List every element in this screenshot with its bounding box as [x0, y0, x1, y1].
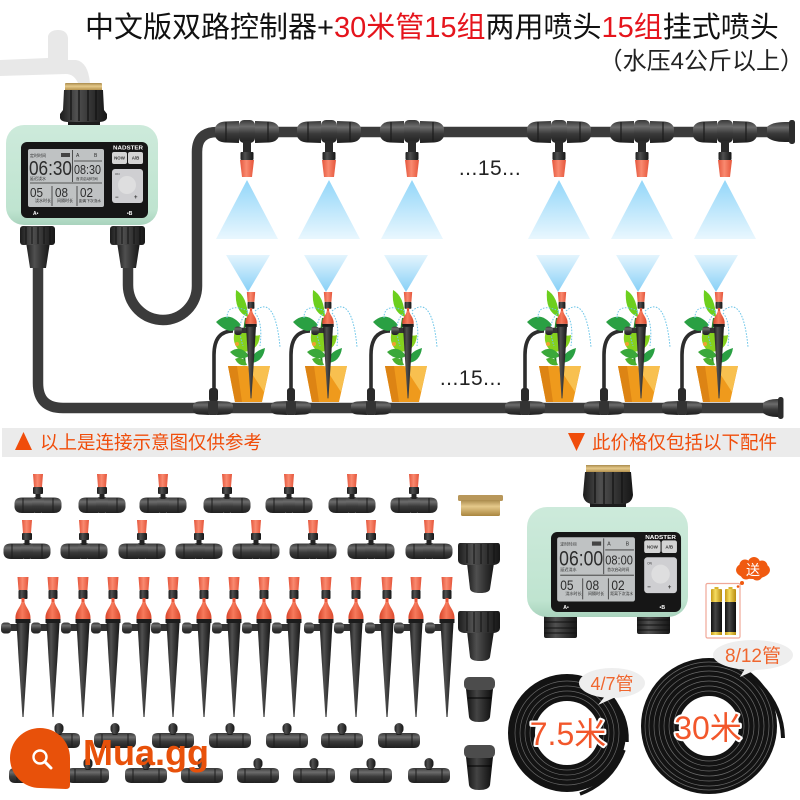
product controller face with LCD: 首次启动时间	[607, 567, 630, 572]
callout: 8/12 tube bubble	[713, 640, 793, 677]
controller face with LCD: 08:30	[74, 163, 101, 177]
icon: hose connector 1	[458, 543, 500, 593]
spray cones: plant nozzles	[226, 255, 738, 292]
banner text: left note: 以上是连接示意图仅供参考	[40, 432, 262, 453]
title: 中文版双路控制器+30米管15组两用喷头15组挂式喷头	[85, 11, 779, 44]
product controller face with LCD: 08:00	[605, 552, 633, 568]
label: 30 m: 30米	[674, 710, 742, 746]
label: ...15... bottom: ...15...	[440, 367, 502, 390]
product controller face with LCD: •B	[660, 605, 665, 611]
row: top misting tee connectors	[215, 120, 757, 177]
controller face with LCD: 06:30	[29, 158, 72, 180]
coil: 7.5 m micro tube	[515, 681, 627, 794]
spray cones: hanging nozzles	[216, 180, 756, 239]
callout: free gift cloud: 送	[746, 562, 760, 578]
product controller face with LCD: ON	[647, 562, 652, 566]
controller face with LCD: 延迟浇水	[30, 175, 46, 181]
controller face with LCD: +	[134, 195, 138, 201]
watermark: Mua.gg logo	[10, 728, 209, 789]
product controller face with LCD: 浇水时长	[565, 590, 582, 596]
row 1: hanging misting tees	[14, 474, 438, 513]
watermark text: Mua.gg	[83, 732, 209, 773]
controller face with LCD: 02	[80, 185, 93, 200]
product controller face with LCD: NADSTER	[645, 535, 676, 541]
diagram: hoses	[38, 132, 772, 408]
icon: brass adapter	[458, 495, 503, 516]
product controller face with LCD: +	[668, 584, 672, 591]
product controller body	[527, 507, 688, 617]
product controller face with LCD: A/B	[665, 544, 674, 549]
controller face with LCD: −	[115, 195, 119, 201]
callout: 4/7 tube bubble: 4/7管	[590, 674, 634, 694]
row 2: hanging misting tees	[4, 520, 452, 559]
product controller face with LCD: A	[607, 542, 611, 548]
controller face with LCD: A	[76, 153, 80, 159]
controller face with LCD: NOW	[114, 156, 126, 160]
product controller face with LCD: 08	[586, 578, 599, 593]
controller body	[6, 125, 158, 225]
row 5: blind tee connectors	[9, 758, 450, 783]
product controller face with LCD: 05	[560, 578, 574, 593]
icon: hose connector 2	[458, 611, 500, 661]
product: dual outlet controller	[527, 465, 688, 638]
label: ...15... top: ...15...	[459, 157, 521, 180]
coil: 30 m main hose	[645, 662, 783, 790]
product controller face with LCD: 定时时间	[560, 541, 577, 547]
controller face with LCD: 08	[55, 185, 68, 200]
watermark badge	[10, 728, 70, 789]
product controller face with LCD	[551, 532, 681, 612]
subtitle: water pressure note: （水压4公斤以上）	[599, 48, 800, 75]
product controller face with LCD: 06:00	[559, 547, 603, 571]
product controller face with LCD: 距离下次浇水	[610, 591, 633, 596]
row 4: blind tee connectors	[38, 723, 420, 748]
icon: top hose end cap	[767, 120, 795, 144]
icon: boxed batteries	[706, 584, 740, 638]
controller face with LCD: NADSTER	[113, 146, 143, 152]
icon: end plug 1	[464, 677, 495, 722]
product controller face with LCD: 间隔时长	[588, 590, 604, 596]
callout: 8/12 tube bubble: 8/12管	[725, 645, 781, 667]
controller face with LCD: A/B	[132, 156, 139, 160]
row: plant stake nozzles	[234, 292, 725, 398]
banner text: right note: 此价格仅包括以下配件	[592, 432, 777, 453]
icon: lower hose end cap	[763, 397, 784, 419]
icon: controller with tap nut	[6, 83, 158, 268]
icon: end plug 2	[464, 745, 495, 790]
row 3: spike stake nozzles	[1, 577, 455, 717]
controller face with LCD: ON	[115, 172, 120, 176]
controller face with LCD	[21, 142, 148, 218]
controller face with LCD: 浇水时长	[35, 197, 51, 203]
icon: grey faucet silhouette	[0, 30, 90, 83]
controller face with LCD: 定时时间	[30, 152, 46, 158]
banner	[2, 428, 800, 457]
controller face with LCD: •B	[127, 211, 133, 217]
product controller face with LCD: 02	[611, 578, 625, 593]
product controller face with LCD: A•	[563, 605, 569, 611]
product controller face with LCD: NOW	[647, 544, 659, 549]
row: lower hose tee connectors	[193, 388, 702, 415]
controller face with LCD: 首次启动时间	[76, 176, 98, 181]
controller face with LCD: 间隔时长	[57, 197, 73, 203]
label: 7.5 m: 7.5米	[530, 716, 606, 752]
callout: 4/7 tube bubble	[579, 668, 645, 705]
row: potted plants	[210, 290, 748, 402]
product controller face with LCD: B	[626, 542, 630, 548]
controller face with LCD: 距离下次浇水	[79, 198, 101, 203]
controller face with LCD: 05	[30, 185, 43, 200]
callout: free gift cloud	[736, 557, 770, 588]
product controller face with LCD: −	[647, 584, 651, 591]
icon: up triangle	[15, 432, 32, 450]
controller face with LCD: A•	[33, 211, 39, 217]
controller face with LCD: B	[94, 153, 98, 159]
controller outlets	[20, 226, 145, 268]
product controller face with LCD: 延迟浇水	[560, 566, 577, 572]
icon: down triangle	[568, 433, 585, 451]
